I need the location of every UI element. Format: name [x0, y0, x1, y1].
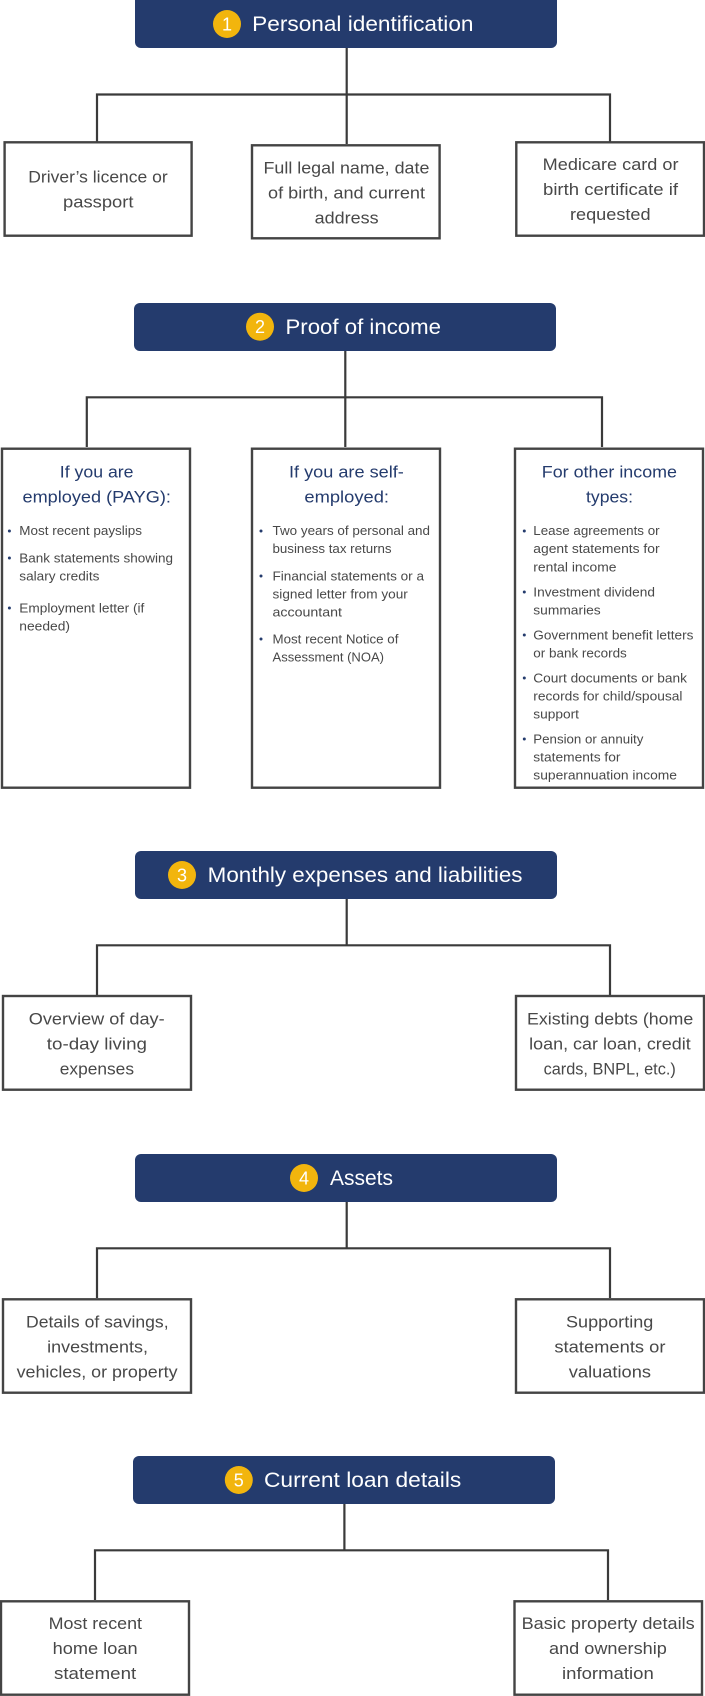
- box: supporting statements: valuations: [569, 1362, 651, 1381]
- heading: proof of income: Proof of income: [286, 315, 441, 339]
- panel: employed: salary credits: [19, 568, 100, 583]
- box: driver's licence: Driver’s licence or: [28, 167, 168, 186]
- panel: other income types: Investment dividend: [533, 584, 655, 599]
- heading: monthly expenses and liabilities: Monthly expenses and liabilities: [208, 863, 522, 887]
- panel: other income types: or bank records: [533, 645, 627, 660]
- panel: other income types: [515, 449, 703, 788]
- section 4: assets: [3, 1154, 704, 1393]
- box: supporting statements: statements or: [554, 1337, 666, 1356]
- box: day-to-day living expenses: to-day living: [47, 1034, 147, 1053]
- heading: current loan details: 5: [234, 1470, 244, 1490]
- box: medicare card: birth certificate if: [543, 180, 678, 199]
- box: day-to-day living expenses: expenses: [60, 1059, 134, 1078]
- box: home loan statement: [1, 1601, 189, 1695]
- panel: other income types: records for child/spousal: [533, 688, 683, 703]
- box: savings and property details: [3, 1299, 191, 1393]
- box: savings and property details: Details of savings,: [26, 1312, 169, 1331]
- box: day-to-day living expenses: Overview of day-: [29, 1009, 165, 1028]
- panel: employed: [2, 449, 190, 788]
- heading: monthly expenses and liabilities: 3: [177, 865, 187, 885]
- box: full legal name: address: [315, 208, 379, 227]
- box: property details: Basic property details: [522, 1614, 695, 1633]
- box: property details: and ownership: [549, 1639, 667, 1658]
- panel: other income types: types:: [586, 487, 633, 506]
- box: home loan statement: statement: [54, 1664, 136, 1683]
- heading: current loan details: [133, 1456, 555, 1504]
- box: existing debts: Existing debts (home: [527, 1009, 693, 1028]
- panel: other income types: Court documents or bank: [533, 670, 688, 685]
- box: medicare card: requested: [570, 205, 651, 224]
- heading: assets: 4: [299, 1168, 309, 1188]
- section 5: current loan details: [1, 1456, 702, 1695]
- panel: self-employed: If you are self-: [289, 462, 404, 481]
- heading: assets: [135, 1154, 557, 1202]
- panel: self-employed: [252, 449, 440, 788]
- panel: employed: Most recent payslips: [19, 523, 143, 538]
- panel: employed: needed): [19, 618, 70, 633]
- heading: assets: Assets: [330, 1166, 393, 1190]
- connector lines: [97, 1202, 610, 1298]
- panel: other income types: summaries: [533, 602, 601, 617]
- box: existing debts: loan, car loan, credit: [529, 1034, 691, 1053]
- panel: other income types: rental income: [533, 559, 616, 574]
- panel: other income types: support: [533, 706, 579, 721]
- panel: employed: employed (PAYG):: [22, 487, 171, 506]
- heading: current loan details: Current loan details: [264, 1468, 461, 1492]
- box: day-to-day living expenses: [3, 996, 191, 1090]
- panel: other income types: Government benefit letters: [533, 627, 694, 642]
- panel: other income types: Pension or annuity: [533, 731, 644, 746]
- heading: personal identification: 1: [222, 14, 232, 34]
- section 2: proof of income: [2, 303, 703, 788]
- panel: employed: Bank statements showing: [19, 550, 173, 565]
- box: home loan statement: Most recent: [49, 1614, 142, 1633]
- panel: self-employed: employed:: [304, 487, 389, 506]
- panel: other income types: Lease agreements or: [533, 523, 660, 538]
- box: savings and property details: investments,: [47, 1337, 148, 1356]
- box: driver's licence: [5, 142, 192, 236]
- panel: self-employed: accountant: [272, 604, 342, 619]
- panel: self-employed: Two years of personal and: [272, 523, 430, 538]
- heading: monthly expenses and liabilities: [135, 851, 557, 899]
- box: driver's licence: passport: [63, 192, 134, 211]
- box: full legal name: Full legal name, date: [264, 158, 429, 177]
- panel: self-employed: Most recent Notice of: [272, 631, 399, 646]
- box: home loan statement: home loan: [53, 1639, 138, 1658]
- panel: other income types: For other income: [542, 462, 677, 481]
- box: medicare card: Medicare card or: [543, 155, 679, 174]
- box: existing debts: cards, BNPL, etc.): [544, 1059, 676, 1078]
- box: property details: information: [562, 1664, 654, 1683]
- panel: employed: If you are: [60, 462, 133, 481]
- box: supporting statements: Supporting: [566, 1312, 653, 1331]
- box: savings and property details: vehicles, or property: [17, 1362, 178, 1381]
- panel: other income types: superannuation income: [533, 767, 677, 782]
- connector lines: [97, 48, 610, 144]
- connector lines: [95, 1504, 608, 1600]
- section 3: monthly expenses and liabilities: [3, 851, 704, 1090]
- box: medicare card: [516, 142, 704, 236]
- panel: other income types: statements for: [533, 749, 621, 764]
- connector lines: [97, 899, 610, 995]
- panel: self-employed: Financial statements or a: [272, 568, 425, 583]
- panel: self-employed: signed letter from your: [272, 586, 408, 601]
- box: supporting statements: [516, 1299, 704, 1393]
- box: property details: [514, 1601, 702, 1695]
- box: full legal name: [252, 145, 440, 238]
- section 1: personal identification: [5, 0, 704, 238]
- panel: employed: Employment letter (if: [19, 600, 145, 615]
- heading: personal identification: Personal identification: [252, 12, 474, 36]
- box: full legal name: of birth, and current: [268, 183, 425, 202]
- heading: proof of income: 2: [255, 317, 265, 337]
- box: existing debts: [516, 996, 704, 1090]
- panel: other income types: agent statements for: [533, 541, 660, 556]
- heading: personal identification: [135, 0, 557, 48]
- heading: proof of income: [134, 303, 556, 351]
- panel: self-employed: business tax returns: [272, 541, 392, 556]
- panel: self-employed: Assessment (NOA): [272, 649, 384, 664]
- connector lines: [87, 351, 602, 447]
